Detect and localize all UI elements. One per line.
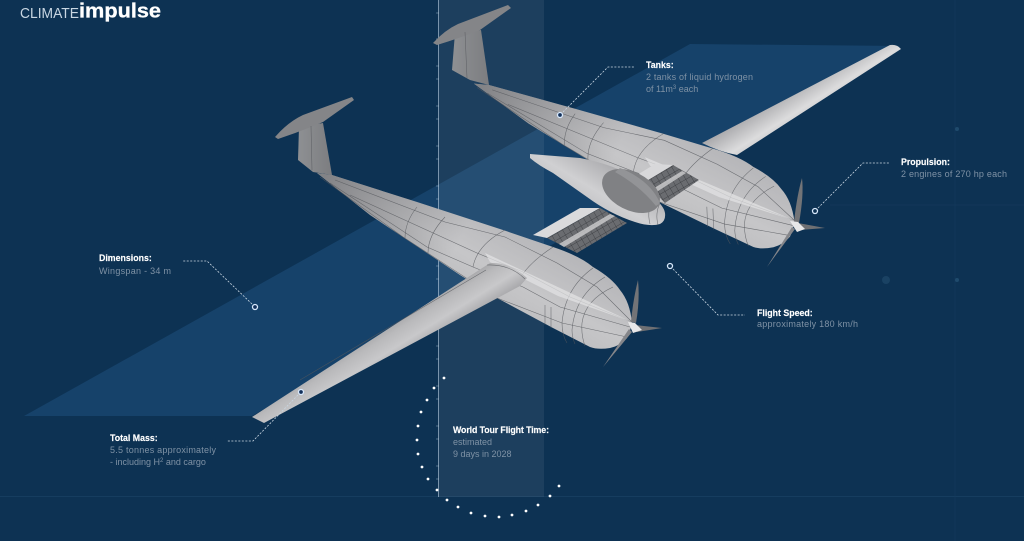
timeline band [438, 0, 544, 497]
logo: CLIMATE [20, 5, 79, 22]
callout: propulsion [812, 157, 1007, 214]
callout: world tour flight time [453, 425, 549, 459]
rear tail [433, 5, 511, 85]
callout: dimensions: Dimensions: [99, 253, 152, 263]
callout: tanks: of 11m [646, 84, 673, 94]
callout: total mass: 2 [160, 458, 164, 464]
callout: total mass: 5.5 tonnes approximately [110, 445, 216, 455]
callout: tanks: Tanks: [646, 60, 674, 70]
callout: world tour flight time: 9 days in 2028 [453, 449, 512, 459]
logo [20, 0, 161, 22]
callout: dimensions: Wingspan - 34 m [99, 266, 171, 276]
callout: dimensions [99, 253, 258, 310]
callout: tanks: 3 [673, 85, 677, 91]
rear propeller [767, 178, 825, 267]
front propeller [603, 280, 662, 367]
timeline axis with ticks [436, 0, 439, 497]
callout: tanks: each [676, 84, 698, 94]
front fuselage [317, 173, 632, 349]
callout: flight speed [668, 264, 858, 329]
callout: tanks [558, 60, 753, 118]
right solar wing [637, 164, 699, 203]
central pod [530, 154, 667, 225]
callout: propulsion: 2 engines of 270 hp each [901, 169, 1007, 179]
callout: total mass: Total Mass: [110, 433, 158, 443]
rear wing [702, 45, 901, 155]
callout: total mass [110, 390, 304, 467]
arc of dots [416, 377, 560, 518]
front tail [275, 97, 354, 175]
callout: flight speed: approximately 180 km/h [757, 319, 858, 329]
left solar wing [533, 208, 627, 253]
callout: total mass: and cargo [163, 457, 206, 467]
callout: world tour flight time: World Tour Flight Time: [453, 425, 549, 435]
wingspan shadow [24, 44, 900, 416]
callout: propulsion: Propulsion: [901, 157, 950, 167]
pod canopy [595, 160, 667, 222]
callout: tanks: 2 tanks of liquid hydrogen [646, 72, 753, 82]
rear fuselage [474, 71, 795, 259]
callout: world tour flight time: estimated [453, 437, 492, 447]
callout: total mass: - including H [110, 457, 160, 467]
logo: impulse [79, 0, 161, 22]
front wing [252, 263, 527, 423]
callout: flight speed: Flight Speed: [757, 308, 813, 318]
aircraft illustration [252, 5, 901, 423]
